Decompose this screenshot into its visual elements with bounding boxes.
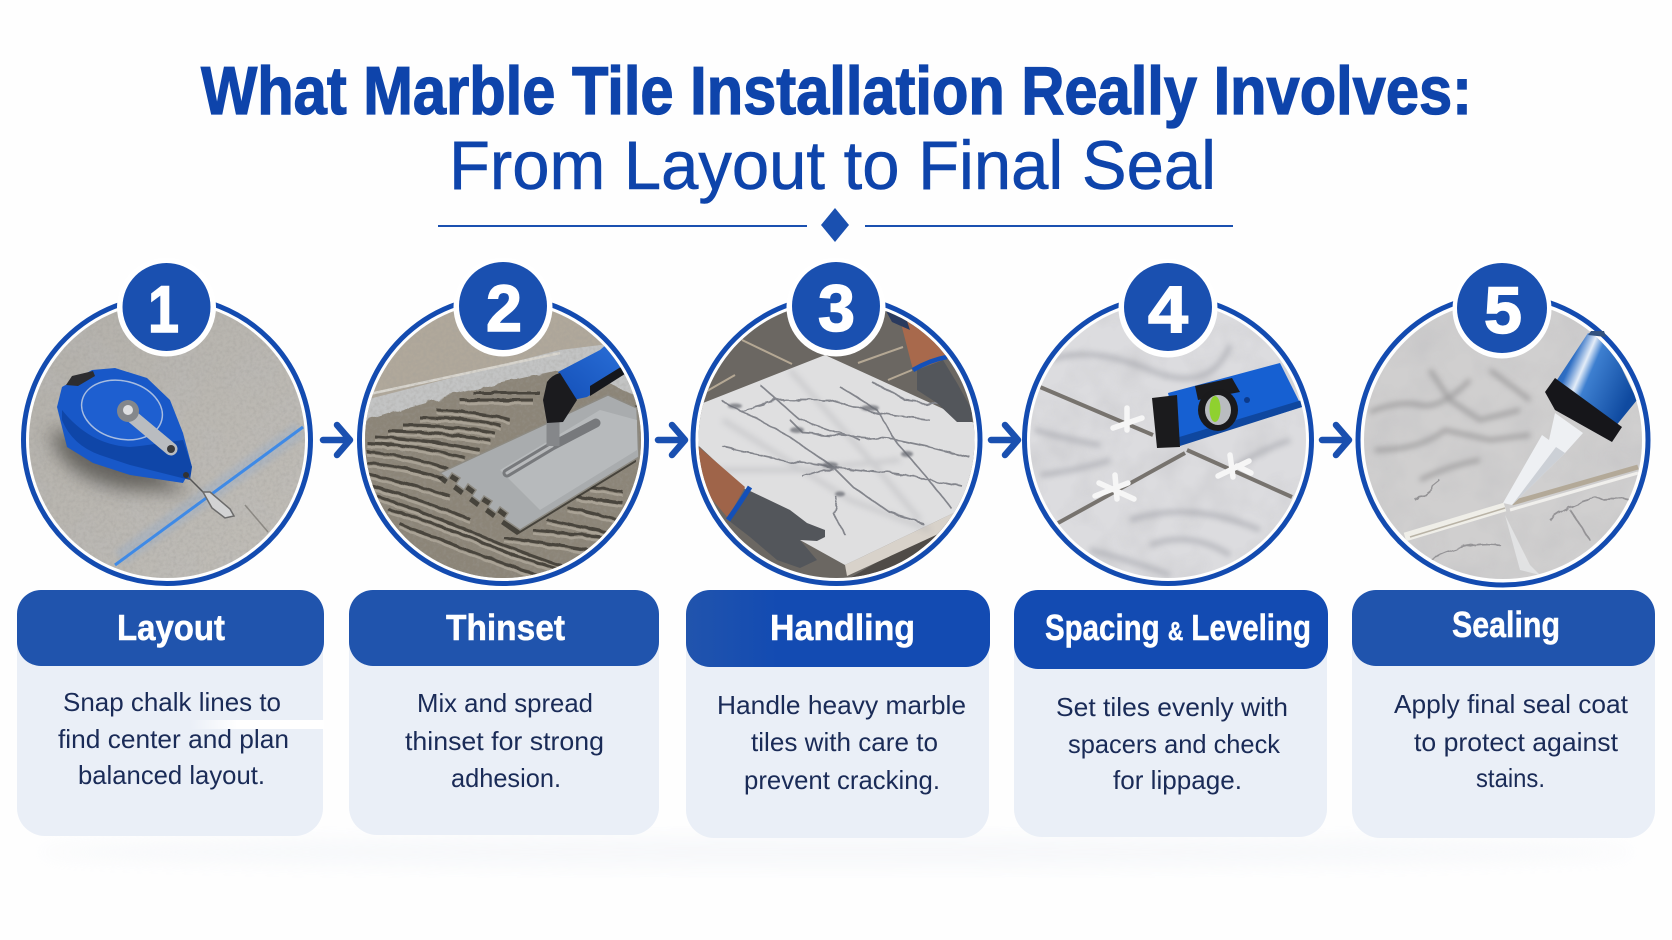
ring bbox=[24, 296, 310, 584]
title line 1: What Marble Tile Installation Really Involves: bbox=[201, 53, 1472, 129]
photo: caulk tube sealing marble joint bbox=[1364, 310, 1642, 579]
body: Sealing: Apply final seal coat bbox=[1394, 689, 1629, 719]
ring bbox=[1024, 296, 1312, 584]
card: Layout bbox=[17, 590, 324, 836]
body: Layout: balanced layout. bbox=[78, 760, 265, 790]
title divider with diamond bbox=[438, 208, 1233, 242]
heading: Sealing: Sealing bbox=[1452, 604, 1560, 645]
arrow 2 bbox=[658, 425, 685, 455]
heading: Thinset: Thinset bbox=[446, 607, 565, 648]
body: Layout: Snap chalk lines to bbox=[63, 687, 281, 717]
number badge 2: 2 bbox=[486, 271, 522, 345]
ring bbox=[693, 296, 980, 584]
card: Spacing and Leveling bbox=[1014, 590, 1328, 837]
body: Sealing: to protect against bbox=[1414, 727, 1619, 757]
body: Spacing and Leveling: for lippage. bbox=[1113, 765, 1242, 795]
photo: notched trowel on thinset bbox=[365, 311, 641, 578]
ring bbox=[1358, 295, 1648, 585]
body: Spacing and Leveling: Set tiles evenly with bbox=[1056, 692, 1288, 722]
white streak bbox=[190, 720, 324, 729]
heading: Handling: Handling bbox=[770, 607, 915, 648]
body: Layout bbox=[58, 687, 289, 790]
card: Handling bbox=[686, 590, 990, 838]
body: Handling bbox=[717, 690, 966, 795]
number badge 3: 3 bbox=[818, 271, 855, 345]
body: Thinset: thinset for strong bbox=[405, 726, 604, 756]
title line 2: From Layout to Final Seal bbox=[449, 127, 1216, 204]
number badge 4: 4 bbox=[1148, 272, 1188, 346]
body: Thinset bbox=[405, 688, 604, 793]
step 1: layout circle bbox=[20, 258, 320, 590]
arrow 4 bbox=[1322, 425, 1349, 455]
body: Sealing bbox=[1394, 689, 1629, 793]
header: Layout bbox=[17, 590, 324, 666]
number badge 5 bbox=[1452, 260, 1552, 358]
header: Handling bbox=[686, 590, 990, 667]
step 5: sealing circle bbox=[1355, 260, 1655, 590]
body: Spacing and Leveling: spacers and check bbox=[1068, 729, 1281, 759]
body: Sealing: stains. bbox=[1476, 763, 1545, 793]
body: Handling: Handle heavy marble bbox=[717, 690, 966, 720]
number badge 4 bbox=[1118, 258, 1218, 358]
body: Thinset: adhesion. bbox=[451, 763, 561, 793]
arrow 1 bbox=[323, 425, 350, 455]
step 3: handling circle bbox=[690, 262, 982, 586]
number badge 2 bbox=[454, 258, 552, 356]
number badge 5: 5 bbox=[1484, 273, 1522, 347]
header: Spacing and Leveling bbox=[1014, 590, 1328, 669]
number badge 1: 1 bbox=[148, 272, 179, 346]
step 4: spacing and leveling circle bbox=[1020, 258, 1320, 590]
card: Thinset bbox=[349, 590, 659, 835]
title bbox=[201, 53, 1472, 204]
card: Sealing bbox=[1352, 590, 1655, 838]
body: Layout: find center and plan bbox=[58, 724, 289, 754]
arrow 3 bbox=[991, 425, 1018, 455]
photo: chalk line reel on concrete bbox=[29, 311, 305, 578]
step 2: thinset circle bbox=[350, 258, 655, 600]
body: Handling: tiles with care to bbox=[751, 727, 938, 757]
ring bbox=[360, 296, 646, 584]
body: Spacing and Leveling bbox=[1056, 692, 1288, 795]
number badge 1 bbox=[117, 258, 216, 356]
body: Thinset: Mix and spread bbox=[417, 688, 593, 718]
body: Handling: prevent cracking. bbox=[744, 765, 940, 795]
header: Sealing bbox=[1352, 590, 1655, 666]
heading: Spacing and Leveling: Spacing & Leveling bbox=[1045, 607, 1311, 648]
photo: level and spacers on marble bbox=[1030, 311, 1306, 578]
number badge 3 bbox=[786, 258, 886, 356]
card shadows bbox=[36, 836, 1636, 868]
caulk tube top overlap bbox=[1588, 331, 1606, 337]
header: Thinset bbox=[349, 590, 659, 666]
heading: Layout: Layout bbox=[117, 607, 225, 648]
photo: gloved hands placing marble tile bbox=[698, 311, 974, 578]
